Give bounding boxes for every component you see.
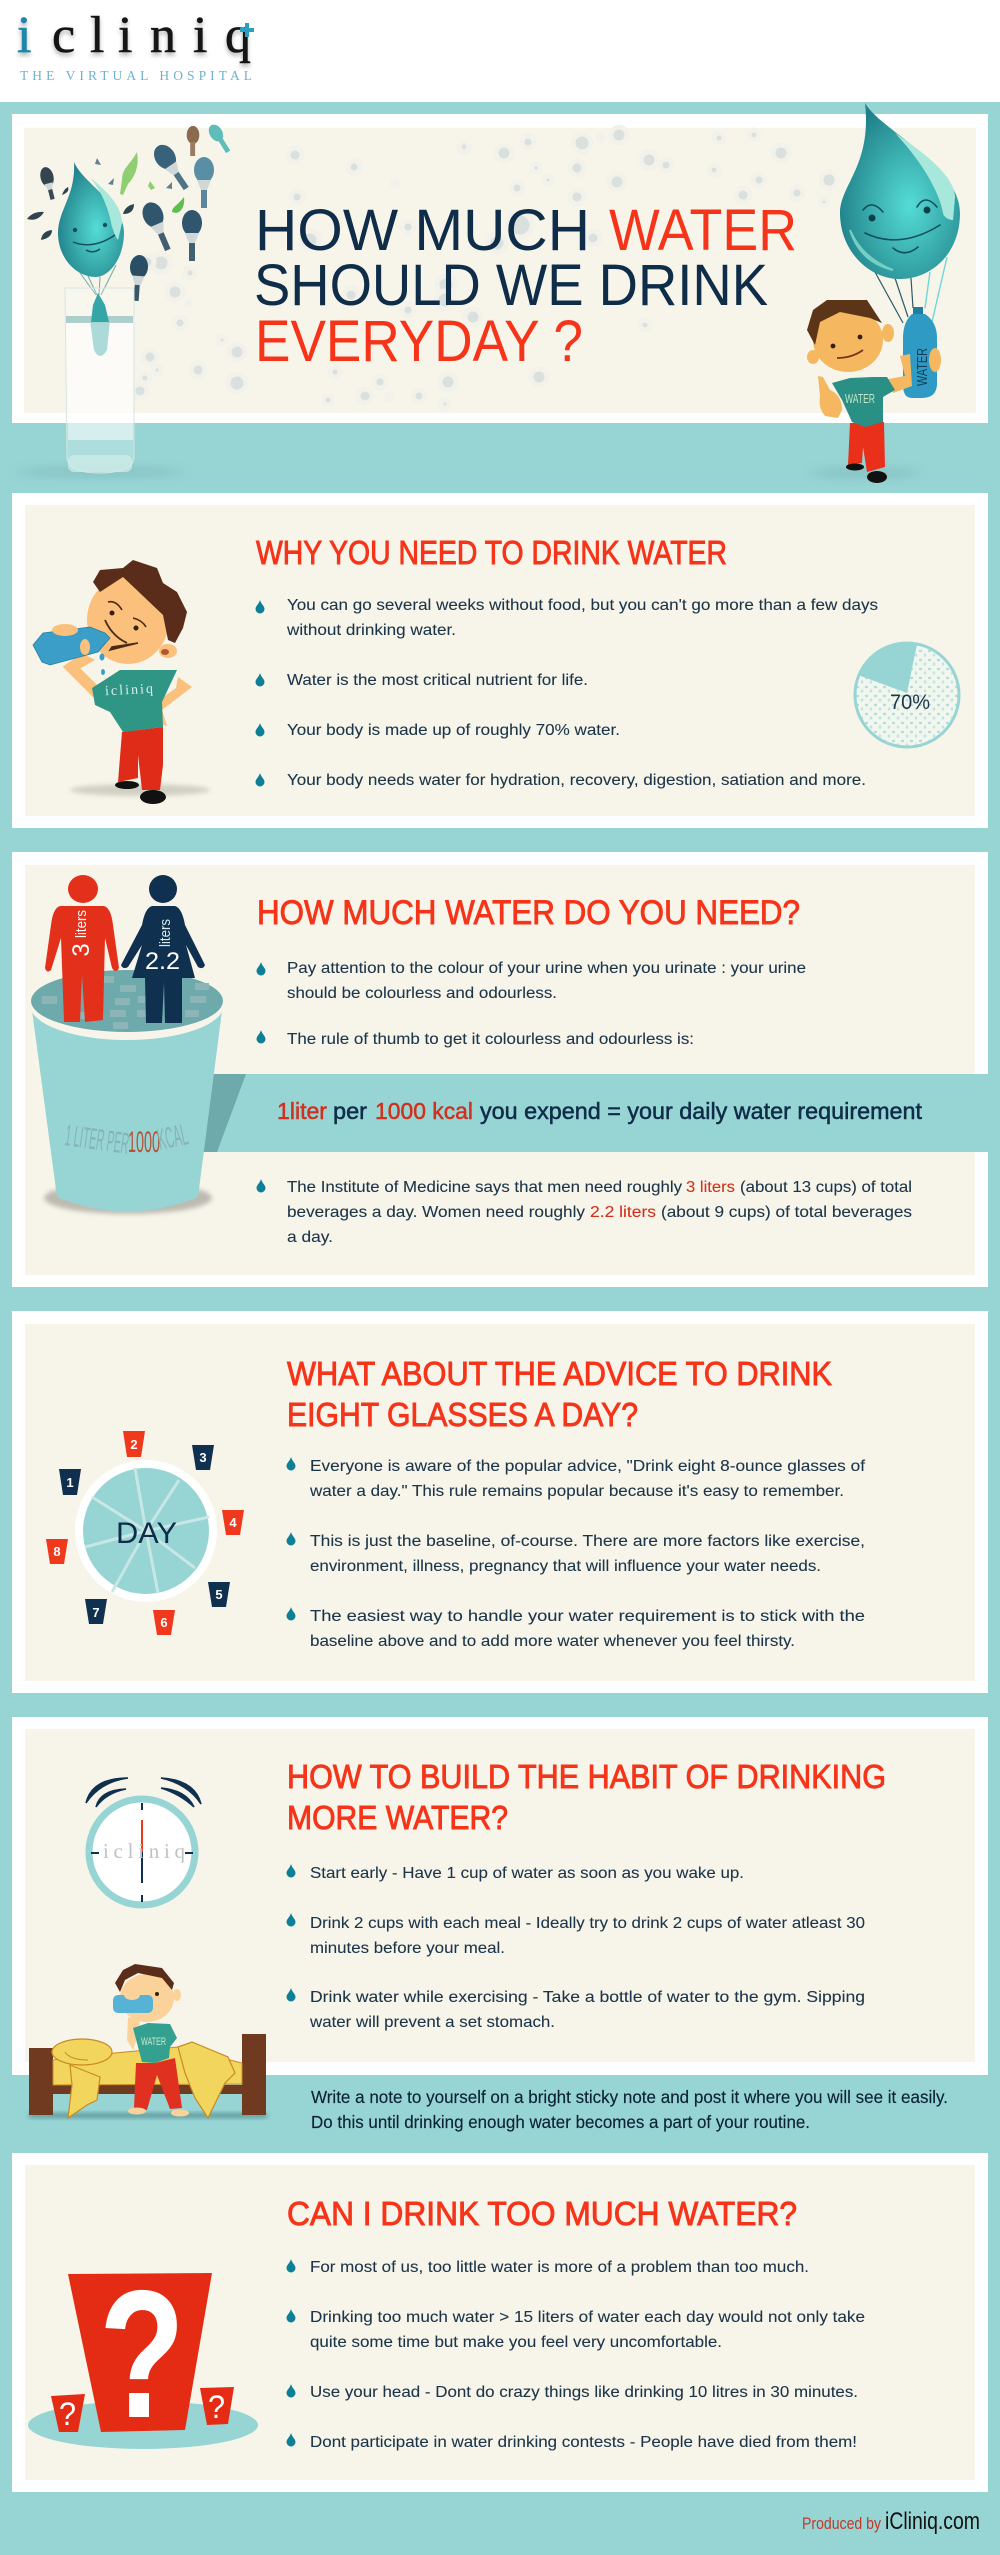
bullet 1: Pay attention to the colour of your urine when you urinate : your urine — [287, 960, 806, 977]
bullet 3 — [286, 1988, 865, 2031]
heading: WHAT ABOUT THE ADVICE TO DRINK — [287, 1355, 832, 1392]
man figure: 3 liters: liters — [73, 910, 90, 938]
title — [254, 198, 797, 374]
note on teal band: Do this until drinking enough water becomes a part of your routine. — [311, 2112, 810, 2132]
title: EVERYDAY ? — [255, 309, 583, 374]
icon: cups with question marks: ? — [208, 2389, 225, 2425]
bullet 1: water a day." This rule remains popular because it's easy to remember. — [309, 1483, 844, 1500]
chart: day wheel: DAY — [116, 1517, 177, 1550]
background bubbles — [133, 127, 837, 408]
icon: left water drop balloon — [58, 162, 124, 295]
credit line: iCliniq.com — [885, 2508, 980, 2535]
bullet 1 — [256, 960, 806, 1002]
logo: icliniq: cliniq — [52, 7, 251, 64]
icons: eight numbered cups — [46, 1431, 244, 1635]
icon: cups with question marks — [28, 2252, 258, 2456]
icons: eight numbered cups: 1 — [66, 1475, 74, 1490]
heading: WHY YOU NEED TO DRINK WATER — [256, 534, 727, 571]
panel: why you need to drink water — [12, 493, 988, 828]
cup label: 1000 — [128, 1126, 160, 1159]
highlight band: 1000 kcal — [375, 1098, 473, 1124]
bullet 2 — [286, 1913, 865, 1957]
icon: boy holding water bottle — [807, 300, 941, 483]
man figure: 3 liters — [45, 875, 119, 1022]
icon: small balloons around left drop — [27, 122, 233, 302]
bullet 2: minutes before your meal. — [310, 1940, 505, 1957]
title: HOW MUCH — [255, 198, 590, 263]
icon: glass of water — [65, 288, 134, 473]
panel: how much water do you need — [12, 852, 988, 1287]
icons: eight numbered cups: 2 — [130, 1437, 138, 1452]
heading: HOW TO BUILD THE HABIT OF DRINKING — [287, 1758, 886, 1795]
bullet 3: (about 9 cups) of total beverages — [661, 1204, 912, 1221]
icons: eight numbered cups: 4 — [229, 1515, 237, 1530]
cup label: 1 LITER PER — [63, 1119, 131, 1161]
bullet 3: baseline above and to add more water whenever you feel thirsty. — [310, 1633, 795, 1650]
panel: build the habit — [12, 1717, 988, 2075]
icons: eight numbered cups: 6 — [160, 1615, 168, 1630]
logo: icliniq — [17, 7, 254, 83]
icon: big cup with figures — [30, 875, 224, 1214]
bullet 2 — [286, 2309, 865, 2351]
heading: HOW MUCH WATER DO YOU NEED? — [257, 894, 800, 932]
highlight band — [201, 1074, 988, 1152]
highlight band: 1liter — [277, 1098, 327, 1124]
woman figure: 2.2 liters — [121, 875, 205, 1023]
cup label — [63, 1118, 191, 1161]
bullet 3: a day. — [287, 1229, 333, 1246]
bullet 1 — [256, 597, 878, 639]
bullet 4: Your body needs water for hydration, recovery, digestion, satiation and more. — [287, 772, 866, 789]
bullet 1 — [286, 1457, 866, 1500]
credit line: Produced by — [802, 2514, 881, 2533]
bullet 2: Drink 2 cups with each meal - Ideally try to drink 2 cups of water atleast 30 — [310, 1915, 865, 1932]
woman figure: 2.2 liters: liters — [157, 919, 174, 947]
icon: alarm clock: icliniq — [103, 1839, 186, 1863]
panel: can I drink too much water — [12, 2153, 988, 2492]
heading: EIGHT GLASSES A DAY? — [287, 1396, 638, 1433]
bullet 3: The easiest way to handle your water requirement is to stick with the — [310, 1608, 865, 1625]
icon: alarm clock — [86, 1778, 201, 1905]
bottle: WATER — [914, 348, 931, 386]
shadows on the ground — [15, 468, 920, 477]
bottle — [903, 307, 937, 398]
heading: MORE WATER? — [287, 1799, 508, 1836]
title: SHOULD WE DRINK — [254, 253, 768, 318]
bullet 3: Use your head - Dont do crazy things like drinking 10 litres in 30 minutes. — [310, 2384, 858, 2401]
bullet 1: Everyone is aware of the popular advice, "Drink eight 8-ounce glasses of — [310, 1458, 866, 1475]
bullet 1: without drinking water. — [286, 622, 456, 639]
highlight band: you expend = your daily water requirement — [480, 1098, 923, 1124]
bullet 3: beverages a day. Women need roughly — [287, 1204, 585, 1221]
panel: eight glasses a day — [12, 1311, 988, 1693]
icon: boy drinking from bottle — [33, 560, 210, 804]
panel: hero — [12, 114, 988, 423]
heading — [287, 1355, 832, 1433]
bullet 1: should be colourless and odourless. — [287, 985, 557, 1002]
pie chart: 70%: 70% — [890, 691, 930, 714]
bullet 3: Drink water while exercising - Take a bottle of water to the gym. Sipping — [310, 1989, 865, 2006]
bullet 1: For most of us, too little water is more of a problem than too much. — [310, 2259, 809, 2276]
icon: boy drinking from bottle: icliniq — [105, 682, 153, 699]
heading: CAN I DRINK TOO MUCH WATER? — [287, 2195, 797, 2232]
bullet 3: (about 13 cups) of total — [740, 1179, 912, 1196]
icons: eight numbered cups: 5 — [215, 1587, 223, 1602]
bullet 2 — [286, 1532, 865, 1575]
chart: day wheel — [75, 1460, 217, 1602]
logo: icliniq: i — [17, 7, 31, 64]
icon: right water drop balloon — [840, 103, 960, 323]
icon: boy on bed drinking water: WATER — [141, 2036, 166, 2048]
bullet 2: Water is the most critical nutrient for life. — [287, 672, 588, 689]
bullet 4: Dont participate in water drinking contests - People have died from them! — [310, 2434, 857, 2451]
icon: boy on bed drinking water — [29, 1964, 267, 2118]
man figure: 3 liters: 3 — [68, 943, 95, 957]
bullet 2: quite some time but make you feel very uncomfortable. — [310, 2334, 722, 2351]
highlight band: per — [333, 1098, 367, 1124]
icon: cups with question marks: ? — [99, 2252, 185, 2456]
icon: boy holding water bottle: WATER — [845, 391, 875, 406]
bullet 3 — [286, 1607, 865, 1650]
icon: big cup with figures: KCAL — [155, 1118, 191, 1157]
bullet 3: 2.2 liters — [590, 1204, 656, 1221]
icons: eight numbered cups: 7 — [92, 1605, 100, 1620]
icons: eight numbered cups: 8 — [53, 1544, 61, 1559]
bullet 3: water will prevent a set stomach. — [309, 2014, 555, 2031]
bullet 2: The rule of thumb to get it colourless and odourless is: — [287, 1031, 694, 1048]
icons: eight numbered cups: 3 — [199, 1450, 207, 1465]
bullet 3: 3 liters — [686, 1179, 735, 1196]
bullet 1: Start early - Have 1 cup of water as soon as you wake up. — [310, 1865, 744, 1882]
note on teal band — [311, 2087, 948, 2132]
note on teal band: Write a note to yourself on a bright sticky note and post it where you will see it easily. — [311, 2087, 948, 2107]
title: WATER — [609, 198, 797, 263]
bullet 3: The Institute of Medicine says that men need roughly — [287, 1179, 682, 1196]
icon: cups with question marks: ? — [59, 2396, 76, 2432]
logo: icliniq: THE VIRTUAL HOSPITAL — [20, 68, 252, 83]
bullet 1: You can go several weeks without food, but you can't go more than a few days — [287, 597, 878, 614]
heading — [287, 1758, 886, 1836]
woman figure: 2.2 liters: 2.2 — [145, 948, 180, 975]
bullet 2: environment, illness, pregnancy that will influence your water needs. — [310, 1558, 821, 1575]
bullet 3 — [256, 1179, 912, 1246]
bullet 3: Your body is made up of roughly 70% water. — [287, 722, 620, 739]
credit line — [802, 2508, 980, 2535]
pie chart: 70% — [855, 643, 959, 747]
bullet 2: Drinking too much water > 15 liters of water each day would not only take — [310, 2309, 865, 2326]
bullet 2: This is just the baseline, of-course. There are more factors like exercise, — [310, 1533, 865, 1550]
